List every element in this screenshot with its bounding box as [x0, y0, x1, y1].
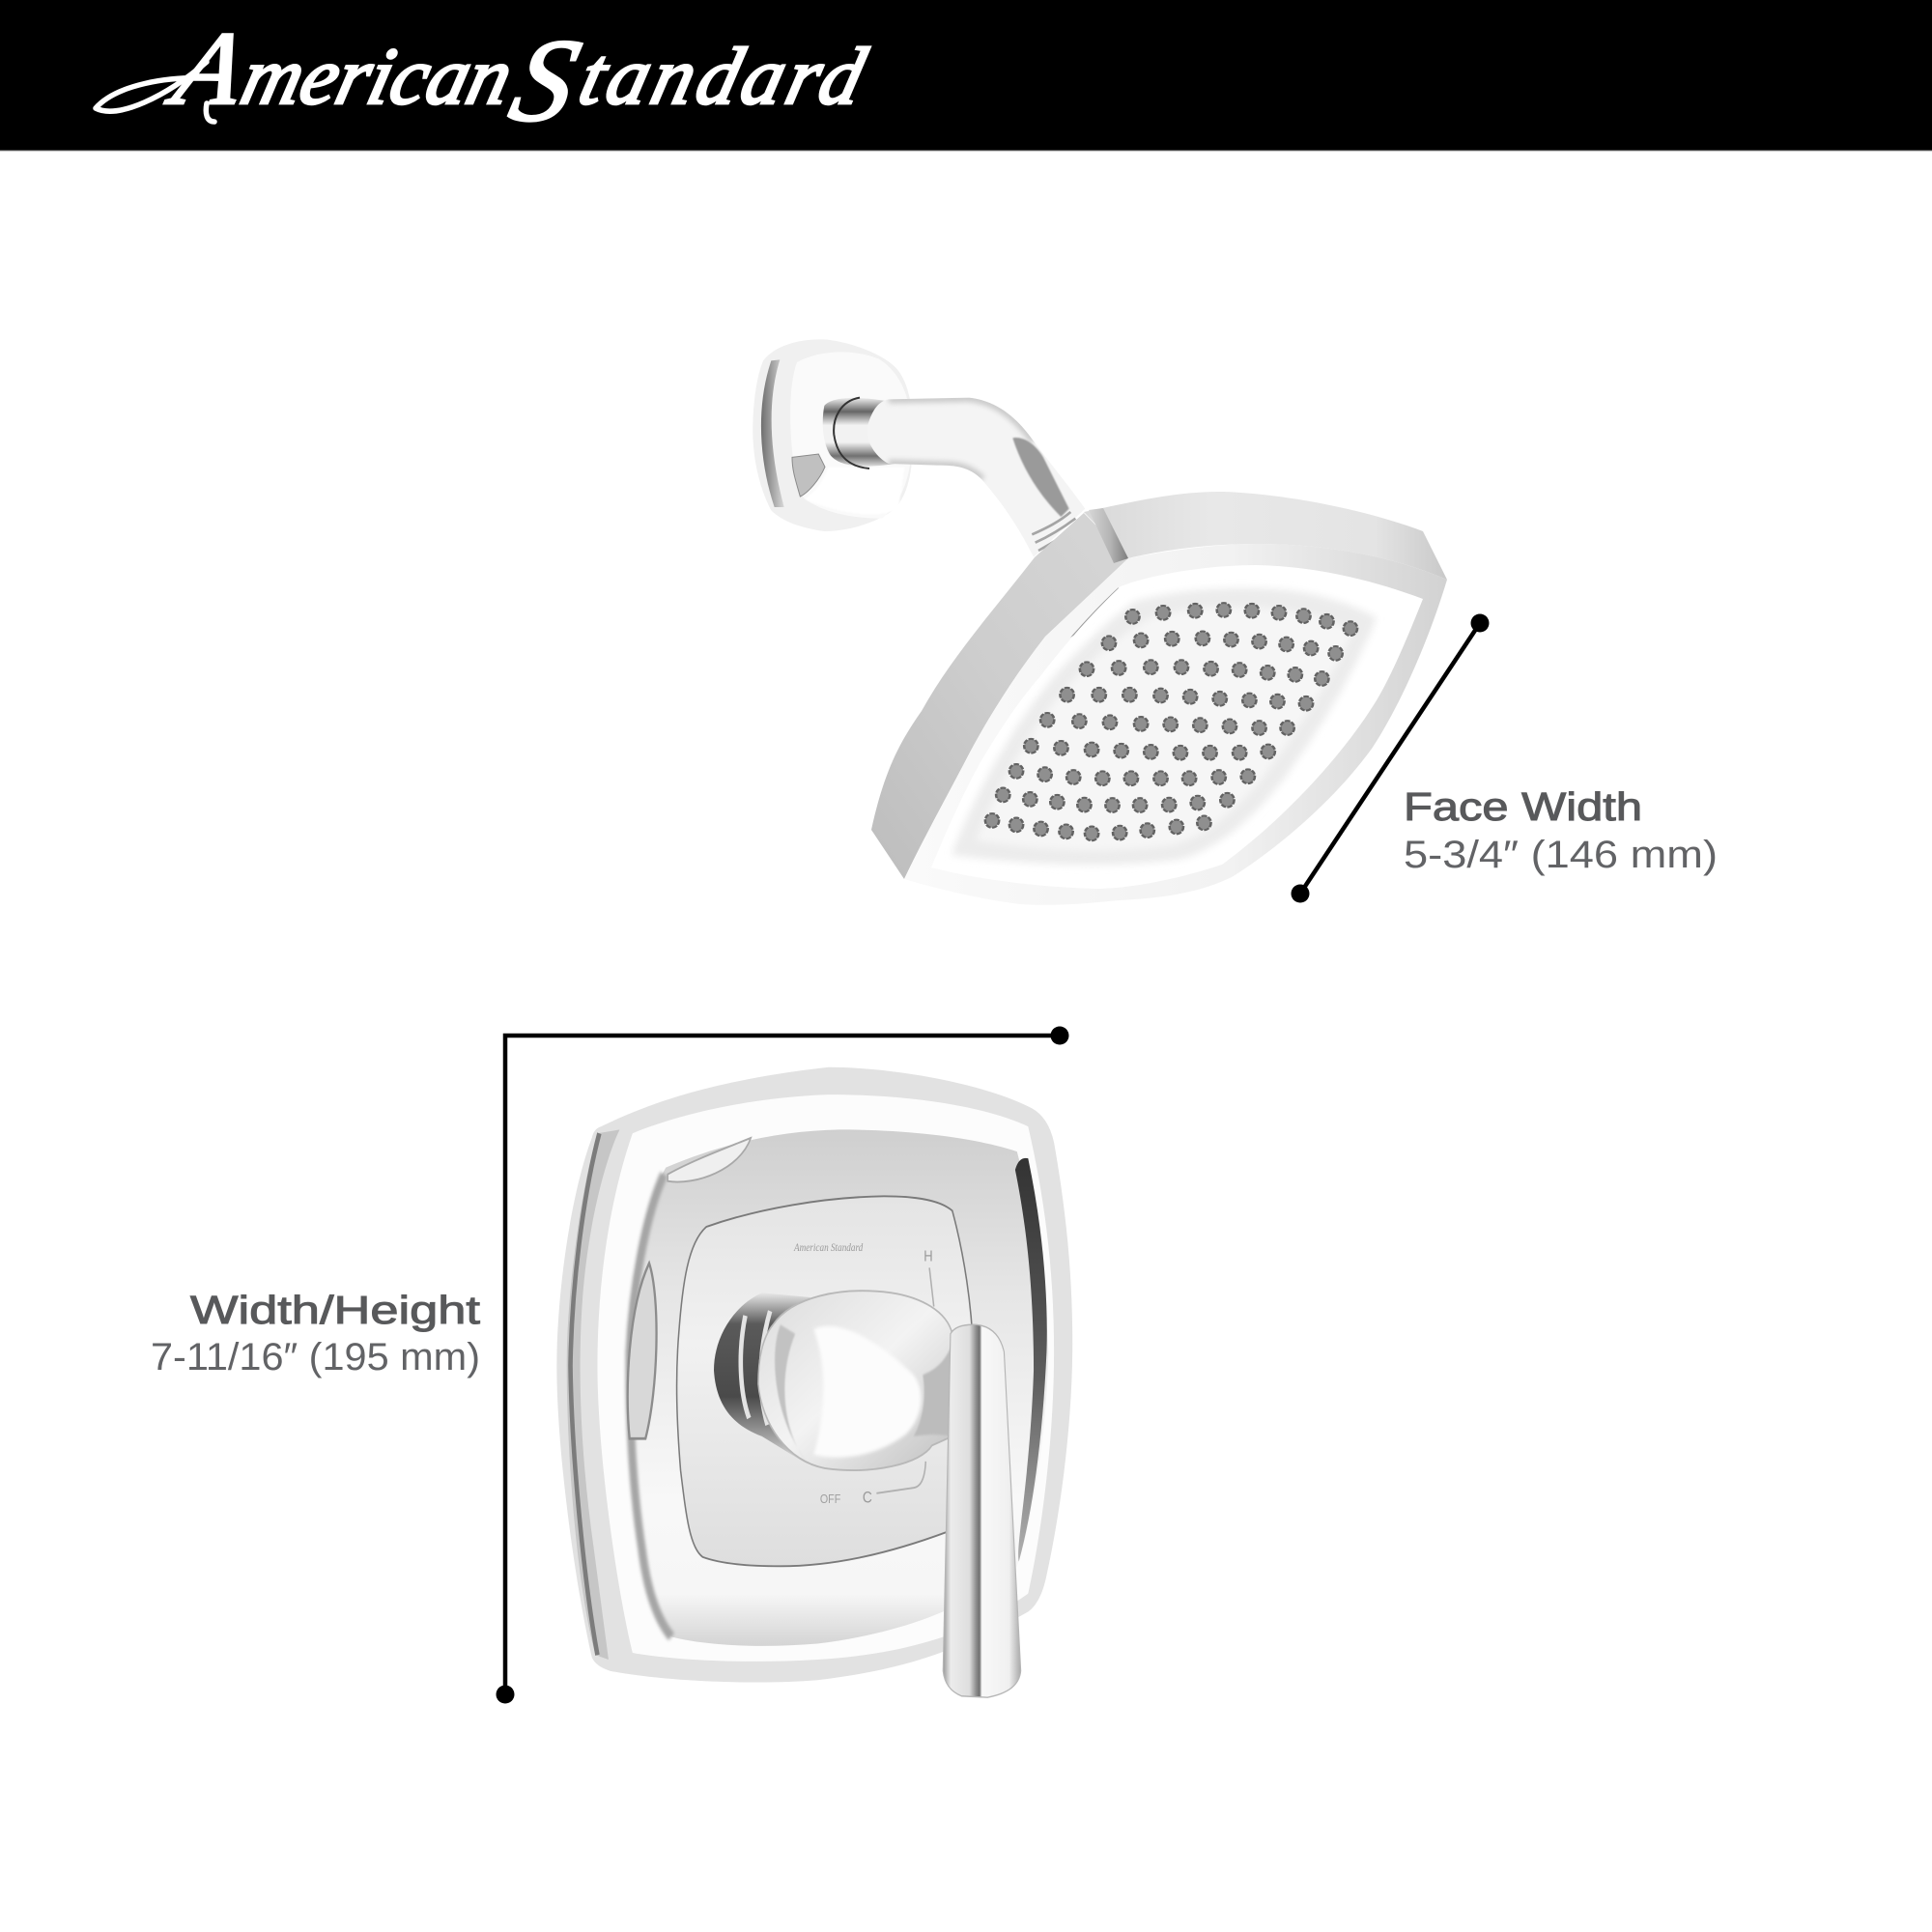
frame left chrome strip	[567, 1129, 619, 1660]
head front rim	[904, 544, 1447, 905]
header bar with logo	[0, 0, 1932, 151]
width/height label: 7-11/16″ (195 mm)	[151, 1336, 480, 1378]
valve trim plate with lever handle	[556, 1067, 1072, 1697]
head side face	[871, 513, 1128, 879]
wall flange	[753, 339, 913, 531]
spray nozzles	[985, 603, 1357, 840]
arm pipe	[867, 398, 1085, 557]
face width label: 5-3/4″ (146 mm)	[1404, 834, 1718, 876]
knob body	[758, 1291, 952, 1470]
logo wordmark: A	[158, 10, 258, 127]
face width dimension line	[1291, 614, 1490, 902]
nozzle plate	[931, 565, 1423, 889]
engraved brand mark: American Standard	[793, 1242, 864, 1254]
center plate	[677, 1196, 974, 1566]
arm nut	[823, 398, 895, 469]
knob facet	[813, 1326, 921, 1458]
off label: OFF	[820, 1492, 840, 1507]
head top face	[1084, 492, 1447, 580]
logo wordmark: S	[499, 15, 591, 146]
hot label: H	[923, 1248, 933, 1265]
width/height dimension line	[497, 1026, 1068, 1704]
knob ribs	[714, 1293, 810, 1466]
face width label: Face Width	[1404, 784, 1642, 829]
width/height label	[151, 1288, 481, 1378]
width/height label: Width/Height	[190, 1288, 481, 1332]
logo wordmark: merican	[233, 32, 522, 122]
recessed panel	[627, 1129, 1048, 1646]
white frame band	[597, 1094, 1054, 1662]
outer frame	[556, 1067, 1072, 1683]
logo wordmark	[96, 10, 883, 146]
knob neck	[914, 1343, 952, 1436]
cold label: C	[863, 1489, 872, 1507]
face width label	[1404, 784, 1718, 876]
shower head with arm and wall flange	[753, 339, 1447, 905]
wall flange and arm	[753, 339, 1085, 557]
head edge band	[1089, 508, 1128, 563]
lever handle	[943, 1324, 1021, 1697]
logo wordmark: tandard	[571, 32, 878, 122]
